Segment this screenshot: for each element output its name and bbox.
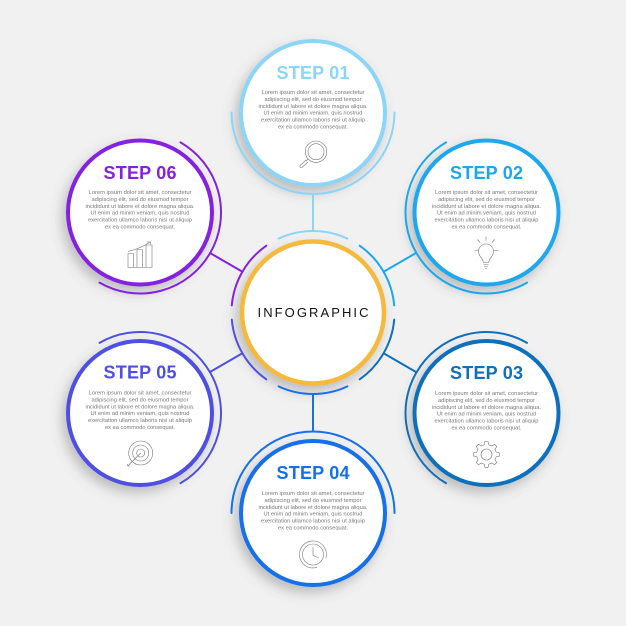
panel: step 05 — [68, 341, 212, 485]
icon: magnifier — [300, 141, 327, 168]
connector: step 01 — [279, 194, 347, 239]
outer arc: step 05 — [100, 332, 221, 483]
outer arc: step 01 — [232, 112, 394, 194]
panel: step 03 — [414, 341, 558, 485]
panel: step 06 — [68, 140, 212, 284]
heading: step 03: STEP 03 — [450, 363, 523, 383]
heading: step 01: STEP 01 — [276, 63, 350, 83]
text block: step 02: ex ea commodo consequat. — [452, 224, 522, 230]
heading: infographic: INFOGRAPHIC — [258, 305, 368, 320]
text block: step 06: Lorem ipsum dolor sit amet, consectetur — [88, 190, 192, 196]
outer arc: step 03 — [406, 332, 527, 483]
text block: step 04: Ut enim ad minim veniam, quis nostrud — [264, 512, 362, 518]
text block: step 05: exercitation ullamco laboris nisi ut aliquip — [88, 418, 193, 424]
text block: step 01: Lorem ipsum dolor sit amet, consectetur — [262, 90, 365, 96]
text block: step 01: adipiscing elit, sed do eiusmod tempor — [264, 97, 362, 103]
outer arc: step 02 — [406, 142, 527, 293]
text block: step 03: incididunt ut labore et dolore magna aliqua. — [432, 405, 541, 411]
connector: step 06 — [210, 246, 266, 305]
text block: step 02: exercitation ullamco laboris nisi ut aliquip — [434, 218, 539, 224]
text block: step 05: Lorem ipsum dolor sit amet, consectetur — [88, 390, 192, 396]
connector: step 03 — [360, 320, 416, 379]
connector: step 02 — [360, 246, 416, 305]
text block: step 05: ex ea commodo consequat. — [105, 425, 175, 431]
icon: target — [128, 441, 153, 466]
text block: step 04: ex ea commodo consequat. — [278, 526, 348, 532]
text block: step 05: Ut enim ad minim veniam, quis nostrud — [90, 411, 190, 417]
text block: step 06: Ut enim ad minim veniam, quis nostrud — [90, 211, 190, 217]
text block: step 01: incididunt ut labore et dolore magna aliqua. — [258, 104, 368, 110]
icon: clock — [299, 541, 326, 568]
text block: step 04: exercitation ullamco laboris nisi ut aliquip — [261, 519, 366, 525]
heading: step 04: STEP 04 — [276, 463, 350, 483]
icon: light bulb — [474, 236, 498, 268]
text block: step 02: adipiscing elit, sed do eiusmod tempor — [438, 197, 535, 203]
text block: step 06: incididunt ut labore et dolore magna aliqua. — [86, 204, 195, 210]
text block: step 01: exercitation ullamco laboris nisi ut aliquip — [261, 118, 366, 124]
text block: step 04: incididunt ut labore et dolore magna aliqua. — [258, 505, 368, 511]
text block: step 05: incididunt ut labore et dolore magna aliqua. — [86, 404, 195, 410]
connector: step 04 — [279, 386, 347, 431]
text block: step 04 — [258, 491, 368, 532]
panel: step 01 — [241, 41, 385, 185]
text block: step 05: adipiscing elit, sed do eiusmod tempor — [92, 397, 189, 403]
outer arc: step 06 — [100, 142, 221, 294]
text block: step 02: Ut enim ad minim veniam, quis nostrud — [437, 211, 536, 217]
icon: bar chart — [128, 242, 152, 268]
text block: step 04: Lorem ipsum dolor sit amet, consectetur — [262, 491, 365, 497]
text block: step 03: Lorem ipsum dolor sit amet, consectetur — [435, 391, 538, 397]
panel: step 02 — [414, 140, 558, 284]
text block: step 06: ex ea commodo consequat. — [105, 224, 175, 230]
text block: step 05 — [86, 390, 195, 431]
text block: step 01: Ut enim ad minim veniam, quis nostrud — [264, 111, 362, 117]
text block: step 01 — [258, 90, 368, 130]
text block: step 03 — [432, 391, 541, 432]
panel: center hub — [242, 242, 384, 384]
connector: step 05 — [210, 320, 266, 379]
heading: step 06: STEP 06 — [104, 163, 176, 183]
text block: step 06 — [86, 190, 195, 230]
heading: step 02: STEP 02 — [450, 163, 523, 183]
text block: step 03: Ut enim ad minim veniam, quis nostrud — [437, 412, 536, 418]
text block: step 01: ex ea commodo consequat. — [278, 124, 348, 130]
text block: step 04: adipiscing elit, sed do eiusmod tempor — [264, 498, 362, 504]
icon: gear — [474, 442, 499, 467]
text block: step 06: adipiscing elit, sed do eiusmod tempor — [92, 197, 189, 203]
text block: step 02 — [432, 190, 541, 230]
text block: step 02: Lorem ipsum dolor sit amet, consectetur — [435, 190, 538, 196]
text block: step 06: exercitation ullamco laboris nisi ut aliquip — [88, 218, 193, 224]
panel: step 04 — [241, 441, 385, 585]
text block: step 02: incididunt ut labore et dolore magna aliqua. — [432, 204, 541, 210]
heading: step 05: STEP 05 — [104, 362, 176, 382]
text block: step 03: ex ea commodo consequat. — [452, 426, 522, 432]
outer arc: step 04 — [232, 432, 394, 513]
text block: step 03: exercitation ullamco laboris nisi ut aliquip — [434, 419, 539, 425]
text block: step 03: adipiscing elit, sed do eiusmod tempor — [438, 398, 535, 404]
